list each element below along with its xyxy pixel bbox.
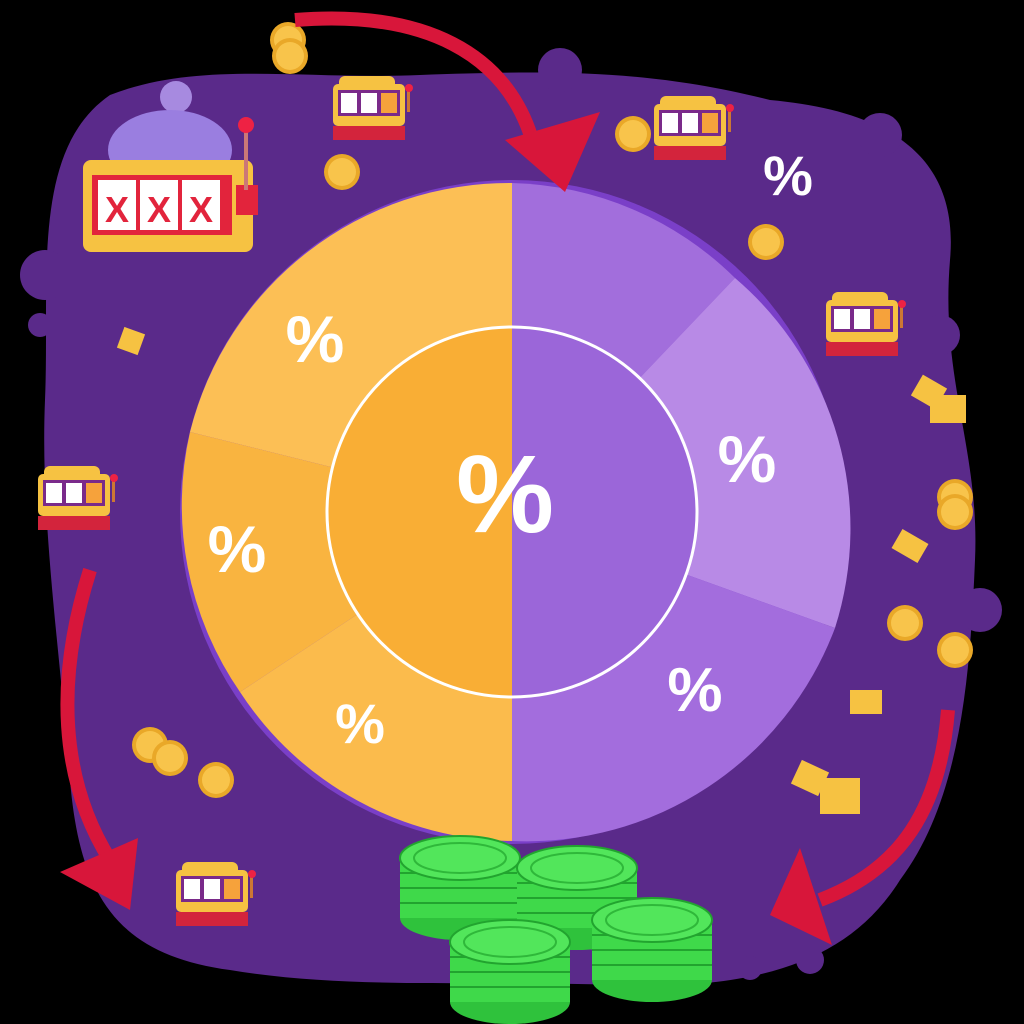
pie chart: % — [208, 512, 266, 586]
slot machines: X — [189, 189, 213, 230]
pie chart: % — [763, 144, 813, 207]
slot machines: X — [147, 189, 171, 230]
labels: % — [286, 302, 344, 376]
pie chart: % — [456, 433, 554, 556]
slot machines — [83, 110, 258, 252]
pie chart: % — [718, 422, 776, 496]
arrow: right — [820, 710, 948, 900]
arrow: top — [295, 19, 535, 150]
pie chart — [180, 144, 850, 844]
arrow: left — [67, 570, 110, 860]
gold coins — [117, 22, 973, 814]
green coin stacks — [400, 836, 712, 1024]
pie chart: % — [335, 692, 385, 755]
pie chart: % — [667, 656, 723, 725]
slot machines: X — [105, 189, 129, 230]
